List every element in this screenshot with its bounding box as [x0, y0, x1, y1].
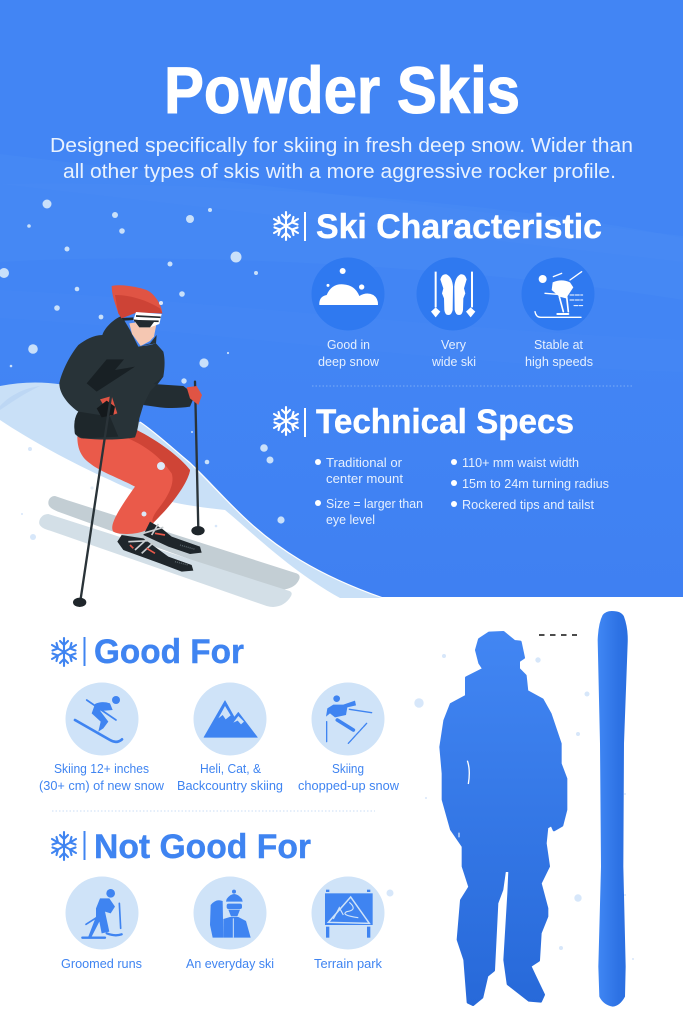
caption: deep snow: deep snow — [318, 355, 380, 369]
person height silhouette — [441, 632, 566, 1005]
list: technical specs: eye level — [326, 512, 375, 527]
subtitle: Designed specifically for skiing in fresh deep snow. Wider than — [50, 134, 633, 157]
background: blue sky panel — [0, 0, 683, 598]
caption: high speeds: Stable at — [534, 338, 584, 352]
jacket — [59, 316, 195, 439]
caption: deep snow: Good in — [327, 338, 370, 352]
ski pole: front — [73, 392, 112, 607]
caption: backcountry: Heli, Cat, & — [200, 762, 262, 776]
pants — [77, 430, 190, 534]
caption: terrain park: Terrain park — [314, 957, 383, 971]
caption: chopped-up snow: Skiing — [332, 762, 364, 776]
icon: mountain — [194, 682, 266, 756]
list: technical specs: Traditional or — [326, 455, 403, 470]
list: technical specs: Rockered tips and tailst — [462, 497, 594, 512]
icon: chopped-snow skier — [312, 682, 384, 756]
list: technical specs: 110+ mm waist width — [462, 455, 579, 470]
icon: snow cloud — [312, 258, 384, 330]
panel: good for — [39, 682, 400, 793]
heading: Good For: Good For — [94, 633, 244, 671]
heading: Technical Specs: Technical Specs — [316, 403, 574, 441]
list: technical specs: center mount — [326, 471, 403, 486]
caption: deep snow — [318, 338, 380, 369]
panel: not good for — [61, 876, 384, 971]
subtitle — [50, 134, 633, 183]
caption: high speeds — [525, 338, 593, 369]
snow dots over skier and hill — [21, 301, 217, 540]
snow dots on white — [386, 654, 634, 960]
caption: chopped-up snow: chopped-up snow — [298, 779, 400, 793]
caption: 12+ inches of new snow: Skiing 12+ inches — [54, 762, 149, 776]
caption: 12+ inches of new snow: (30+ cm) of new snow — [39, 779, 165, 793]
white lower background with snow hill — [0, 383, 683, 1024]
panel: ski characteristics — [312, 258, 594, 369]
caption: backcountry: Backcountry skiing — [177, 779, 283, 793]
heading: Not Good For: Not Good For — [94, 828, 311, 866]
boots — [117, 522, 202, 572]
icon: skier with skis upright — [194, 876, 266, 950]
eye-level dashed marker — [539, 634, 577, 636]
icon: downhill skier — [66, 682, 138, 756]
hat — [112, 285, 162, 318]
subtitle: all other types of skis with a more aggressive rocker profile. — [63, 160, 616, 183]
list: technical specs: 15m to 24m turning radius — [462, 476, 609, 491]
caption: everyday ski: An everyday ski — [186, 957, 274, 971]
caption: 12+ inches of new snow — [39, 762, 165, 793]
icon: wide skis and poles — [416, 258, 490, 330]
goggles — [122, 312, 162, 346]
title: Powder Skis — [164, 53, 520, 127]
icon: groomed runs skier — [66, 876, 138, 950]
caption: backcountry — [177, 762, 283, 793]
snow dots on blue — [0, 200, 285, 524]
list: technical specs — [315, 455, 609, 527]
caption: wide ski: wide ski — [431, 355, 476, 369]
ski pole: rear — [191, 382, 205, 535]
caption: groomed runs: Groomed runs — [61, 957, 142, 971]
ski: upper — [48, 496, 300, 590]
caption: high speeds: high speeds — [525, 355, 593, 369]
list: technical specs: Size = larger than — [326, 496, 423, 511]
face — [129, 319, 157, 346]
icon: terrain park sign — [312, 876, 384, 950]
heading: Ski Characteristic: Ski Characteristic — [316, 208, 602, 246]
ski: lower — [39, 514, 292, 607]
gloves — [97, 386, 202, 417]
icon: fast skier — [522, 258, 594, 330]
caption: wide ski: Very — [441, 338, 467, 352]
ski height silhouette — [598, 611, 628, 1007]
illustration: skier — [39, 285, 300, 607]
caption: chopped-up snow — [298, 762, 400, 793]
caption: wide ski — [431, 338, 476, 369]
